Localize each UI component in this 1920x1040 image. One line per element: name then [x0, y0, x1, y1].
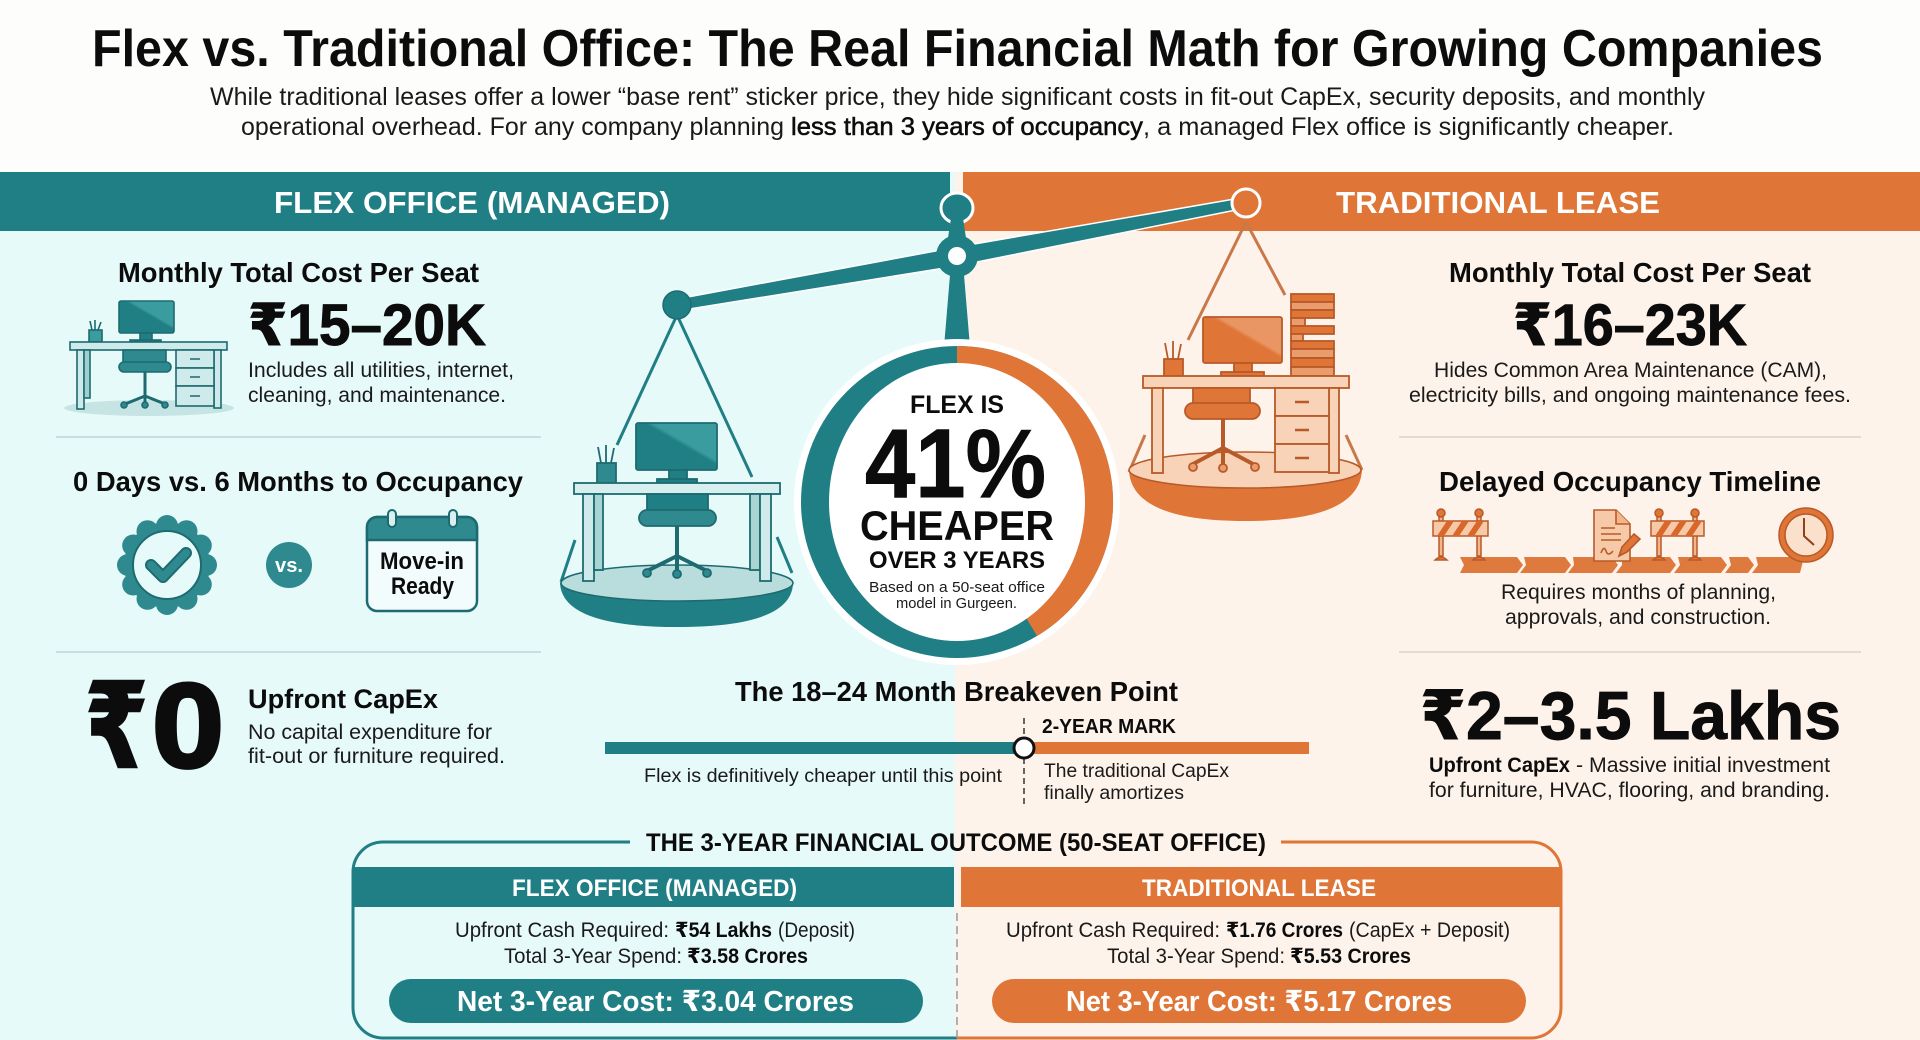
big number: traditional monthly: ₹16–23K [1513, 293, 1747, 358]
label: 2-year mark: 2-YEAR MARK [1042, 716, 1177, 738]
scale strings: right [1129, 222, 1362, 472]
subtitle: While traditional leases offer a lower “base rent” sticker price, they hide significant costs in fit-out CapEx, security deposits, and monthly [210, 83, 1705, 111]
breakeven bar [605, 718, 1309, 805]
label: flex cheaper until: Flex is definitively cheaper until this point [644, 766, 1003, 787]
column: traditional lease: (CapEx + Deposit) [1349, 919, 1510, 942]
big number: zero capex: 0 [152, 659, 224, 793]
breakeven section [605, 676, 1309, 805]
icon: clock [1779, 508, 1833, 562]
scale neck [948, 218, 966, 238]
icon: check badge [117, 515, 217, 615]
panel background: traditional side [955, 172, 1920, 1040]
label: capex amortizes [1044, 761, 1229, 804]
subtitle: less than 3 years of occupancy [791, 113, 1144, 141]
description: delayed occupancy: approvals, and construction. [1505, 605, 1771, 629]
column: traditional lease: Upfront Cash Required: [1006, 919, 1220, 942]
column: flex office: FLEX OFFICE (MANAGED) [512, 875, 797, 902]
description: upfront capex flex: No capital expenditure for [248, 720, 492, 744]
timeline chevrons [1460, 557, 1804, 573]
icon: signed document [1594, 510, 1640, 561]
scale left ball [663, 291, 691, 319]
column: traditional lease: TRADITIONAL LEASE [1142, 875, 1376, 902]
heading: monthly cost traditional: Monthly Total Cost Per Seat [1449, 257, 1811, 288]
net cost pill: flex: Net 3-Year Cost: ₹3.04 Crores [457, 986, 854, 1018]
column: traditional lease: ₹5.53 Crores [1290, 945, 1411, 968]
balance scale [560, 189, 1362, 627]
center callout: flex is 41% cheaper: Based on a 50-seat office [869, 579, 1045, 596]
panel background: header [0, 0, 1920, 172]
column: flex office [353, 867, 954, 1023]
header band: traditional lease: TRADITIONAL LEASE [1336, 185, 1660, 220]
heading: breakeven: The 18–24 Month Breakeven Point [735, 676, 1178, 707]
icon: traditional desk on pan with paper stack [1143, 294, 1349, 473]
description: flex monthly [248, 358, 514, 407]
left pan [560, 565, 793, 627]
big number: zero capex [85, 659, 224, 793]
big number: flex monthly: ₹15–20K [248, 293, 486, 358]
scale strings: left [561, 315, 792, 582]
description: flex monthly: cleaning, and maintenance. [248, 383, 506, 407]
right panel: traditional lease metrics [1399, 257, 1861, 802]
financial outcome box [353, 829, 1561, 1038]
icon: vs circle [266, 542, 312, 588]
description: delayed occupancy [1501, 580, 1776, 629]
subtitle: , a managed Flex office is significantly cheaper. [1143, 113, 1674, 141]
subtitle [210, 83, 1705, 141]
description: upfront capex flex: fit-out or furniture required. [248, 744, 505, 768]
net cost pill: traditional [992, 979, 1526, 1023]
panel background: flex side [0, 172, 955, 1040]
big number: zero capex: ₹ [85, 661, 148, 793]
center callout: flex is 41% cheaper: OVER 3 YEARS [869, 547, 1045, 574]
heading: monthly cost flex: Monthly Total Cost Per Seat [118, 257, 479, 288]
column: traditional lease: ₹1.76 Crores [1226, 919, 1343, 942]
icon: flex desk on pan [574, 423, 780, 581]
center callout: flex is 41% cheaper [794, 339, 1120, 665]
label: capex amortizes: finally amortizes [1044, 783, 1184, 804]
scale beam [677, 197, 1246, 311]
heading: delayed occupancy: Delayed Occupancy Timeline [1439, 466, 1821, 497]
description: traditional capex: for furniture, HVAC, flooring, and branding. [1429, 778, 1830, 802]
center callout: flex is 41% cheaper: model in Gurgeen. [896, 595, 1017, 612]
net cost pill: traditional: Net 3-Year Cost: ₹5.17 Crores [1066, 986, 1452, 1018]
box heading: THE 3-YEAR FINANCIAL OUTCOME (50-SEAT OFFICE) [646, 829, 1266, 857]
box outline: traditional side [957, 842, 1561, 1038]
box outline: flex side [353, 842, 957, 1038]
net cost pill: flex [389, 979, 923, 1023]
center callout: flex is 41% cheaper: CHEAPER [860, 502, 1054, 549]
icon: move-in ready calendar: Move-in [380, 548, 464, 575]
column: flex office: ₹3.58 Crores [687, 945, 808, 968]
icon: barrier two [1651, 509, 1704, 560]
scale post [944, 275, 970, 347]
column: flex office: (Deposit) [778, 919, 855, 942]
big number: traditional capex: ₹2–3.5 Lakhs [1420, 678, 1841, 754]
icon: move-in ready calendar [367, 510, 477, 611]
description: traditional capex: - Massive initial investment [1576, 753, 1830, 777]
description: traditional monthly: Hides Common Area Maintenance (CAM), [1434, 358, 1827, 382]
header band: traditional lease [963, 172, 1920, 231]
label: capex amortizes: The traditional CapEx [1044, 761, 1229, 782]
column: traditional lease [961, 867, 1561, 1023]
heading: upfront capex flex: Upfront CapEx [248, 684, 438, 714]
scale pivot [936, 235, 978, 277]
title: Flex vs. Traditional Office: The Real Financial Math for Growing Companies [92, 20, 1823, 78]
column: flex office: Total 3-Year Spend: [504, 945, 682, 968]
description: traditional capex [1429, 753, 1830, 802]
subtitle: operational overhead. For any company planning [241, 113, 784, 141]
left panel: flex office metrics [56, 257, 541, 793]
description: delayed occupancy: Requires months of planning, [1501, 580, 1776, 604]
description: traditional monthly [1409, 358, 1851, 407]
column: flex office: ₹54 Lakhs [675, 919, 772, 942]
heading: days to occupancy: 0 Days vs. 6 Months to Occupancy [73, 466, 523, 497]
scale right ball [1232, 189, 1260, 217]
icon: vs circle: vs. [275, 555, 303, 577]
column: flex office: Upfront Cash Required: [455, 919, 669, 942]
right pan [1129, 452, 1362, 521]
center callout: flex is 41% cheaper: FLEX IS [910, 391, 1004, 419]
description: traditional capex: Upfront CapEx [1429, 753, 1570, 777]
center callout: flex is 41% cheaper: 41% [865, 409, 1046, 518]
header band: flex office [0, 172, 950, 231]
header band: flex office: FLEX OFFICE (MANAGED) [274, 185, 670, 220]
column: traditional lease: Total 3-Year Spend: [1107, 945, 1285, 968]
icon: move-in ready calendar: Ready [391, 573, 455, 600]
icon: flex desk small [64, 301, 234, 416]
icon: barrier one [1433, 509, 1488, 560]
description: flex monthly: Includes all utilities, internet, [248, 358, 514, 382]
description: upfront capex flex [248, 720, 505, 768]
description: traditional monthly: electricity bills, and ongoing maintenance fees. [1409, 383, 1851, 407]
scale top knob [941, 193, 973, 223]
